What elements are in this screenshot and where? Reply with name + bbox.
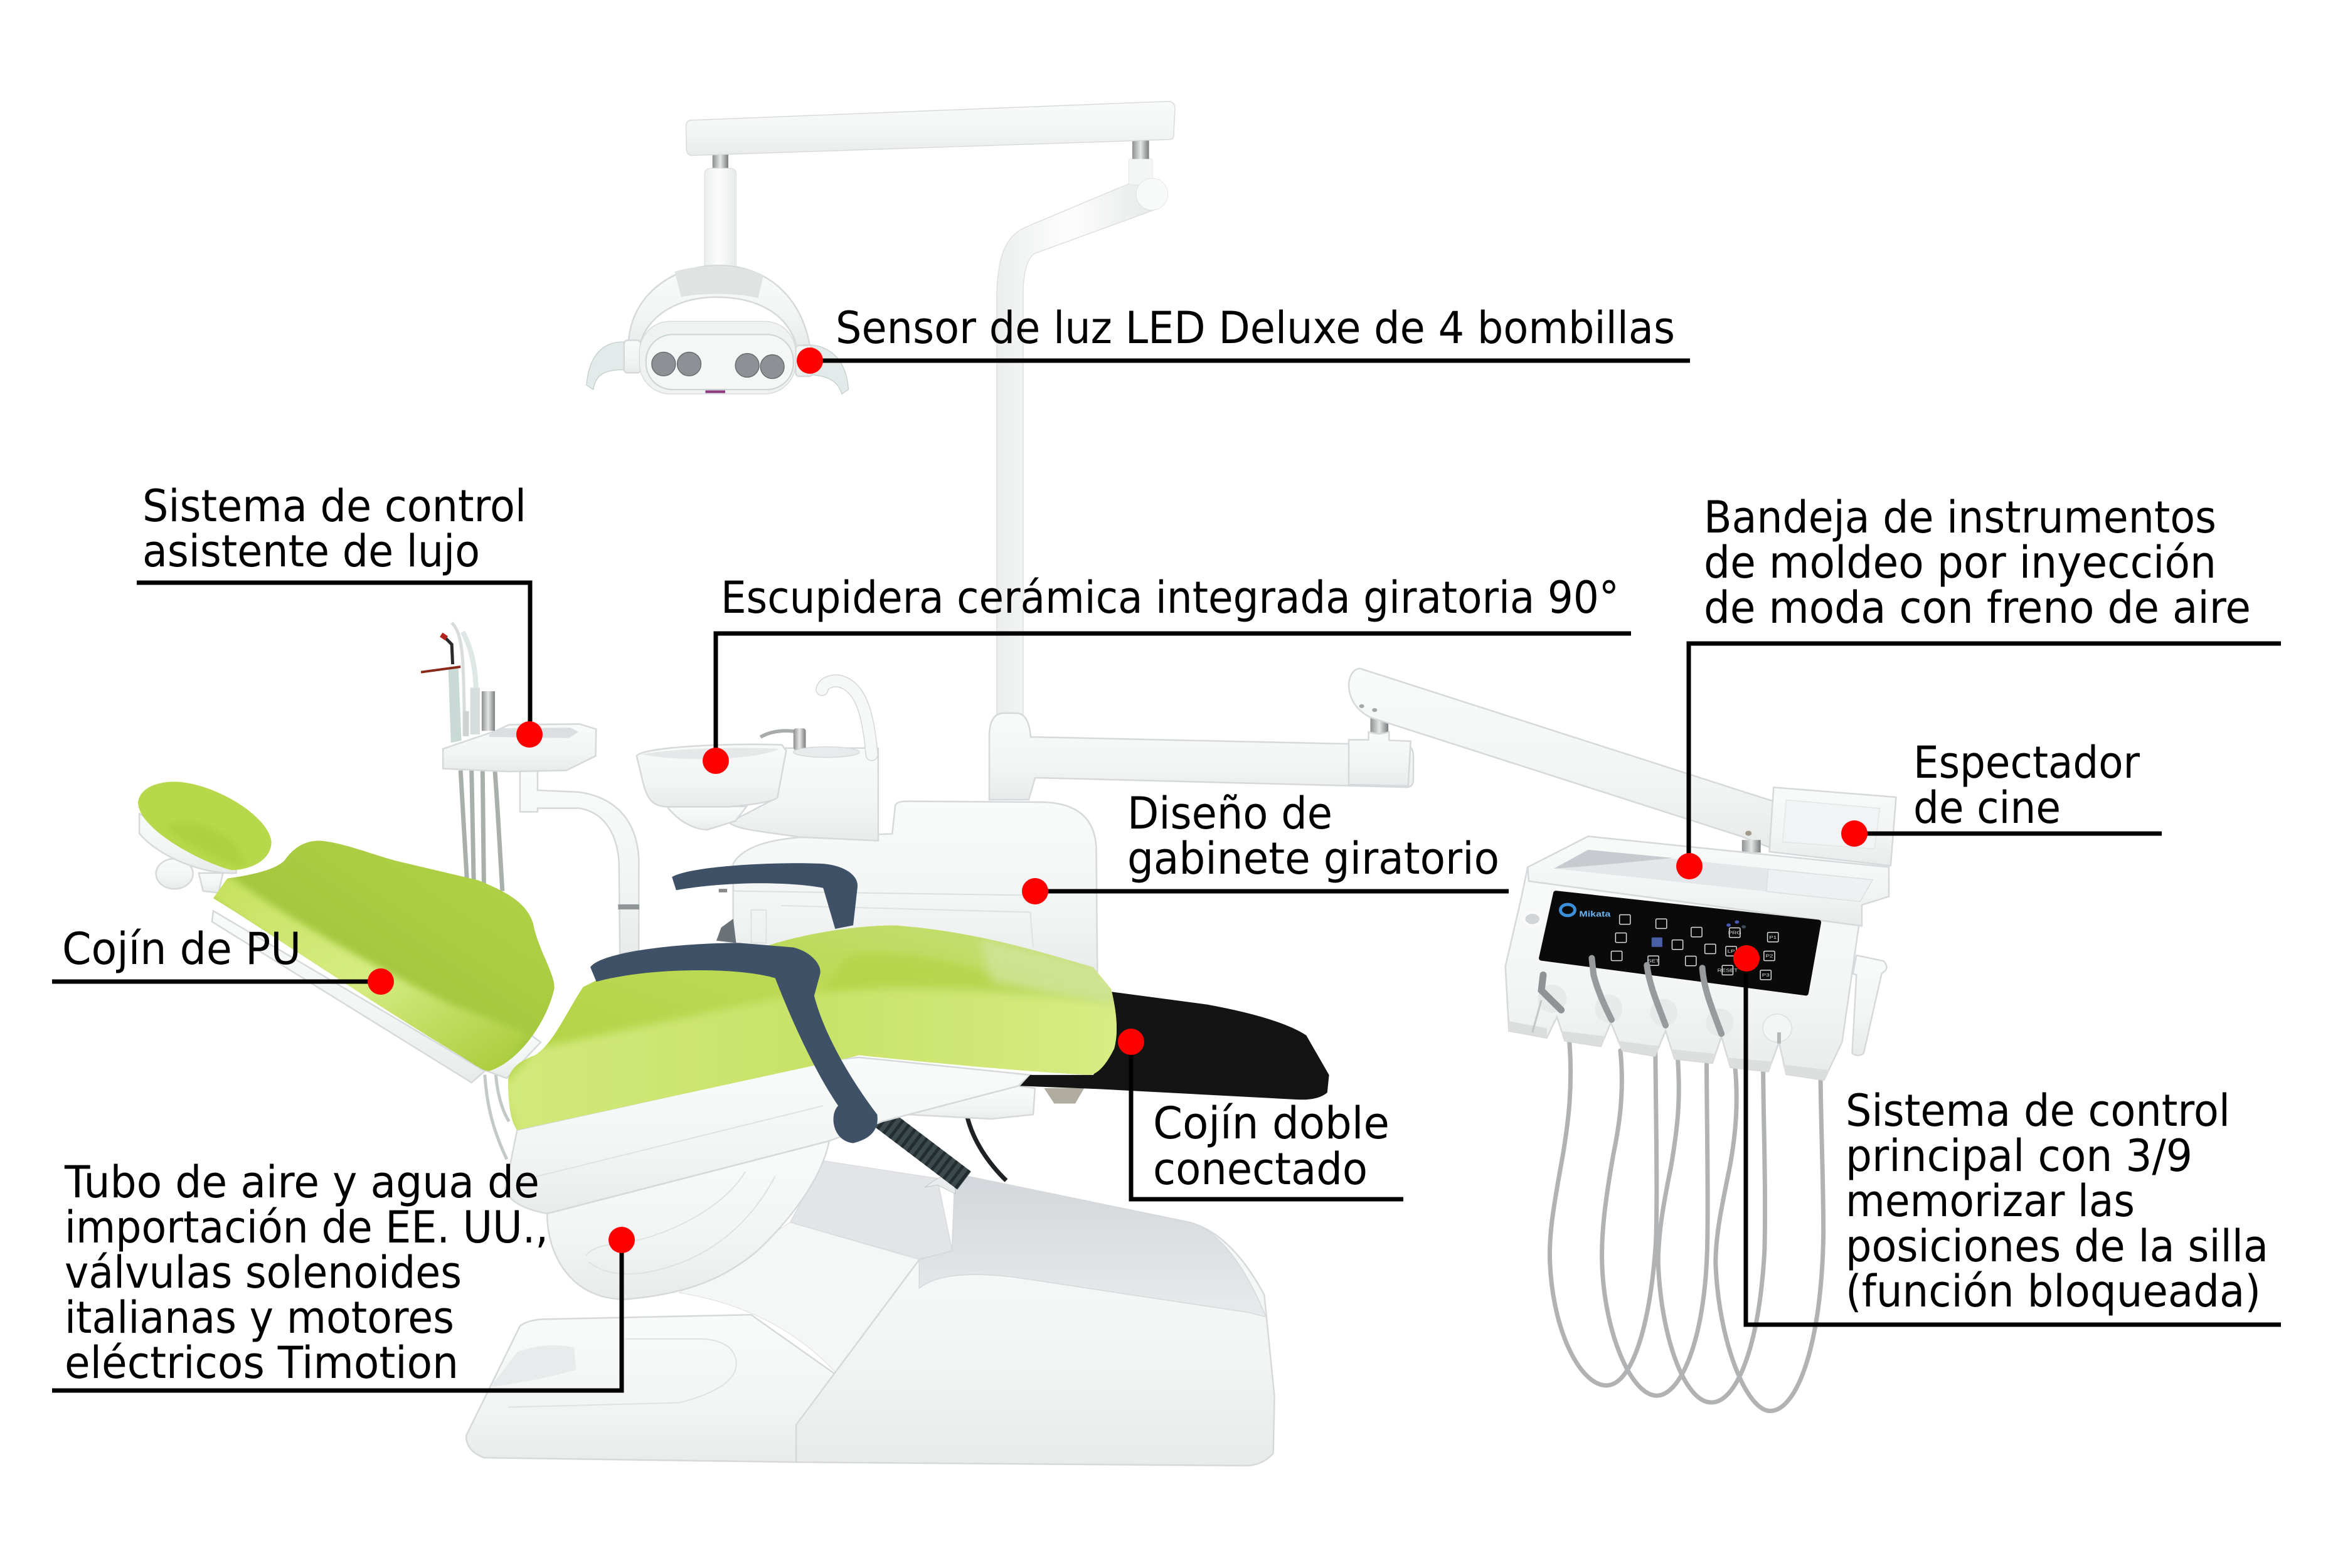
hose under the chair <box>877 1086 1084 1180</box>
X-ray viewer <box>1769 787 1896 866</box>
callout: film viewer: de cine <box>1913 782 2061 834</box>
seat body shell <box>505 1057 1030 1300</box>
instrument delivery unit: P3 <box>1762 972 1770 978</box>
black control panel <box>1541 893 1819 993</box>
side handle <box>1852 955 1887 1056</box>
main body <box>1506 867 1862 1080</box>
instrument delivery unit: Mikata <box>1579 910 1611 919</box>
rear armrest <box>672 863 858 929</box>
callout: main control system: posiciones de la silla <box>1846 1221 2268 1272</box>
cabinet <box>716 802 1097 978</box>
callout: main control system: memorizar las <box>1846 1175 2135 1227</box>
callout: instrument tray: Bandeja de instrumentos <box>1704 492 2216 543</box>
callout: rotating cabinet: gabinete giratorio <box>1127 833 1499 884</box>
callout: main control system: (función bloqueada) <box>1846 1266 2261 1317</box>
callout: LED sensor light: Sensor de luz LED Deluxe de 4 bombillas <box>836 302 1675 354</box>
hoses behind the backrest <box>460 770 509 1159</box>
callout: double connected cushion <box>1118 1029 1403 1199</box>
callout: rotating cabinet: Diseño de <box>1127 788 1332 839</box>
callout: air and water tubing: Tubo de aire y agua de <box>64 1157 539 1208</box>
callout: assistant control system: Sistema de control <box>142 480 526 532</box>
tray <box>1528 836 1889 926</box>
spittoon <box>637 744 878 840</box>
column and horizontal arm <box>989 713 1413 800</box>
callout: main control system <box>1733 945 2281 1325</box>
base of the chair <box>466 1161 1275 1466</box>
seat cushion <box>508 925 1117 1130</box>
instrument delivery unit <box>1506 787 1896 1080</box>
assistant control support and tray <box>421 623 639 954</box>
instrument delivery unit: P1 <box>1769 935 1777 940</box>
callout: double connected cushion: conectado <box>1153 1143 1368 1195</box>
callout: LED sensor light <box>797 302 1690 374</box>
handpiece holders <box>1538 985 1566 1013</box>
dental unit illustration <box>138 102 1896 1466</box>
callout: air and water tubing <box>52 1157 635 1391</box>
instrument delivery unit: RESET <box>1718 968 1738 973</box>
callout: air and water tubing: válvulas solenoides <box>65 1247 462 1298</box>
callout: ceramic spittoon: Escupidera cerámica integrada giratoria 90° <box>721 572 1619 623</box>
handpieces <box>1541 975 1561 1010</box>
headrest <box>138 781 272 893</box>
callout: PU cushion: Cojín de PU <box>62 923 301 975</box>
horizontal light beam <box>686 102 1175 156</box>
callout: air and water tubing: italianas y motores <box>65 1292 454 1343</box>
callout: ceramic spittoon <box>703 572 1631 774</box>
callout: instrument tray: de moda con freno de aire <box>1704 582 2251 633</box>
callout: instrument tray <box>1676 492 2281 879</box>
callout: film viewer: Espectador <box>1913 737 2140 788</box>
backrest cushion <box>201 834 566 1086</box>
callout: assistant control system: asistente de lujo <box>142 526 480 577</box>
callout: instrument tray: de moldeo por inyección <box>1704 537 2216 588</box>
upper delivery arm <box>1349 669 1773 852</box>
callout: double connected cushion: Cojín doble <box>1153 1098 1390 1149</box>
instrument delivery unit: PRG <box>1728 930 1741 935</box>
instrument delivery unit: SET <box>1647 958 1660 963</box>
callout: air and water tubing: eléctricos Timotion <box>65 1337 459 1389</box>
front armrest <box>590 943 878 1143</box>
callout: main control system: Sistema de control <box>1846 1085 2230 1136</box>
delivery hoses <box>1549 1042 1824 1411</box>
operating lamp <box>587 265 848 394</box>
callout: air and water tubing: importación de EE. UU., <box>65 1202 548 1253</box>
callout: PU cushion <box>52 923 394 995</box>
instrument delivery unit: P2 <box>1765 953 1773 958</box>
instrument delivery unit: LP <box>1728 948 1735 954</box>
faucet and cup filler <box>760 681 872 758</box>
callout: rotating cabinet <box>1022 788 1509 904</box>
callout: film viewer <box>1841 737 2162 847</box>
leg rest black pad <box>1020 992 1329 1099</box>
light post and upper arm <box>686 102 1175 724</box>
callout: assistant control system <box>137 480 543 748</box>
callout: main control system: principal con 3/9 <box>1846 1130 2192 1182</box>
